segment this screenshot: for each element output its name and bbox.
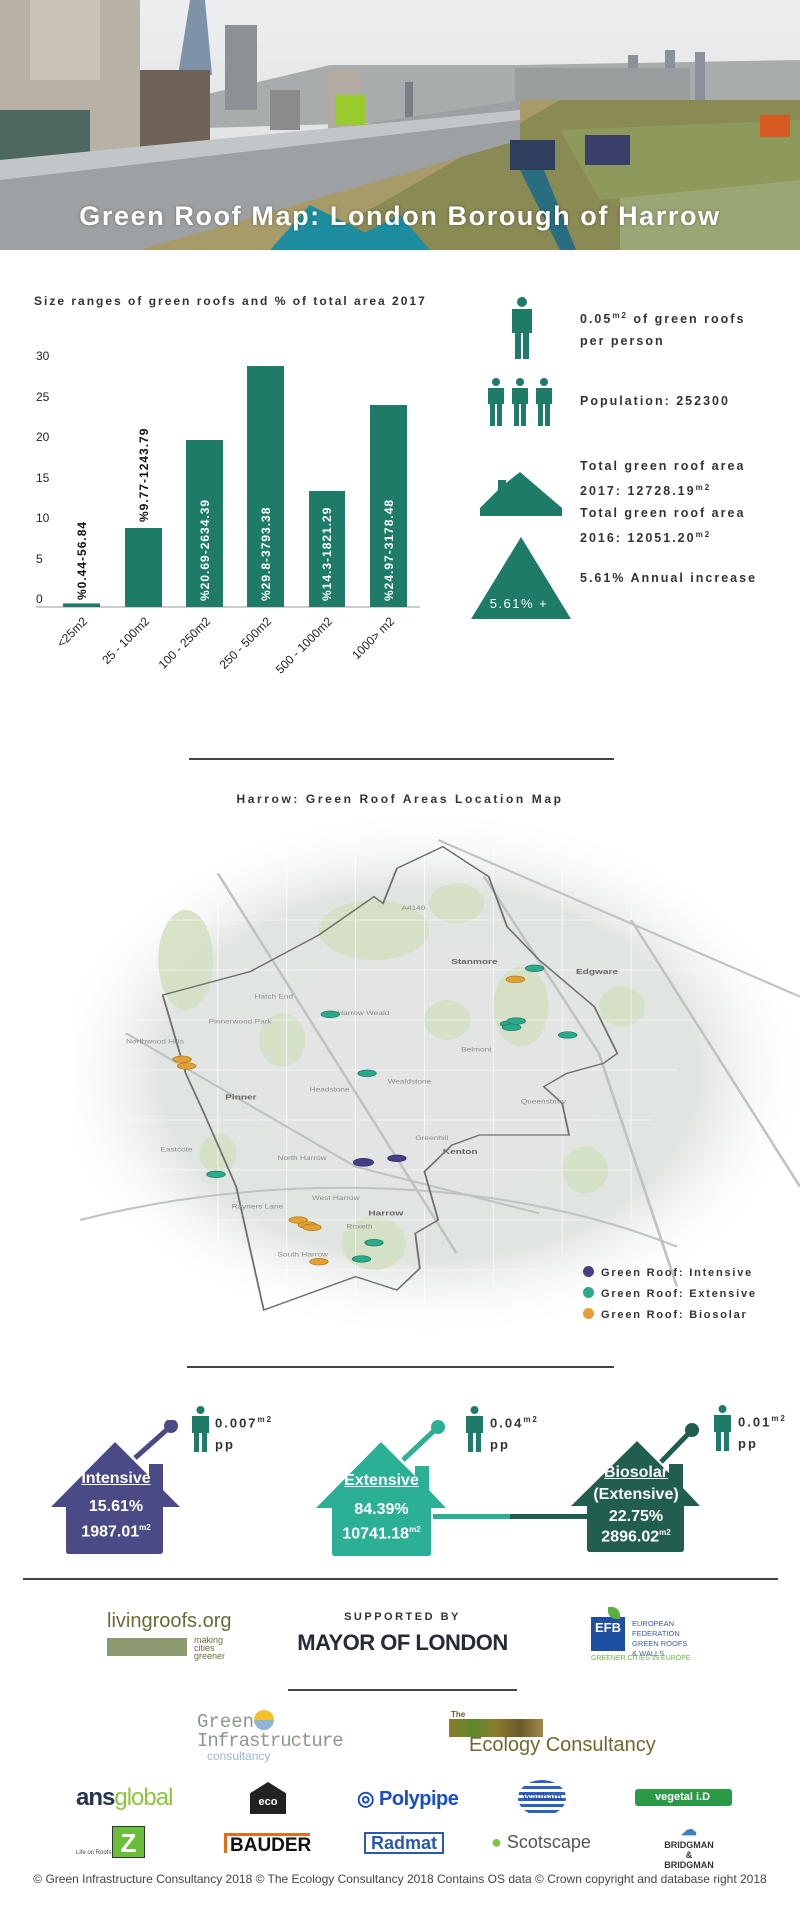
icon: triangle increase: 5.61% + <box>490 596 548 611</box>
house: biosolar: (Extensive) <box>593 1486 679 1503</box>
logo: EFB: & WALLS <box>632 1649 664 1658</box>
map: Greenhill <box>415 1134 449 1142</box>
logo row 1: ◎ Polypipe <box>357 1788 458 1810</box>
bar chart: %14.3-1821.29 <box>320 507 334 601</box>
map: West Harrow <box>312 1194 360 1202</box>
map: Pinnerwood Park <box>209 1018 272 1025</box>
logo: livingroofs: making <box>194 1635 223 1645</box>
logo row 1: vegetal i.D <box>655 1791 710 1803</box>
logo: green infrastructure <box>197 1710 343 1763</box>
bar chart: 100 - 250m2 <box>156 614 213 672</box>
bar chart: %24.97-3178.48 <box>382 499 396 601</box>
person: biosolar pp: 0.01m2 <box>738 1414 787 1429</box>
bar chart: %29.8-3793.38 <box>259 507 273 601</box>
bar chart: 0 <box>36 592 43 606</box>
text: total area: Total green roof area <box>580 506 745 520</box>
map: Eastcote <box>160 1146 193 1153</box>
bar chart: 5 <box>36 552 43 566</box>
header photo <box>0 0 800 250</box>
map title: Harrow: Green Roof Areas Location Map <box>236 792 564 806</box>
footer: © Green Infrastructure Consultancy 2018 © The Ecology Consultancy 2018 Contains OS data © Crown copyright and database right 2018 <box>33 1872 767 1886</box>
bar chart: <25m2 <box>54 614 90 650</box>
logo row 1: eco <box>259 1796 277 1808</box>
supported by: MAYOR OF LONDON <box>297 1630 508 1655</box>
logo row 2: ● Scotscape <box>491 1832 591 1852</box>
house: extensive <box>316 1420 446 1556</box>
map: Edgware <box>576 967 618 976</box>
logo row 2 <box>76 1822 714 1870</box>
logo row 2: BAUDER <box>230 1835 311 1856</box>
map: Stanmore <box>451 957 498 966</box>
logo: EFB: GREENER CITIES IN EUROPE <box>591 1655 691 1662</box>
text: total area: 2017: 12728.19m2 <box>580 483 711 498</box>
logo row 2: Life on Roofs <box>76 1850 111 1856</box>
logo: EFB: FEDERATION <box>632 1629 680 1638</box>
house: intensive: 1987.01m2 <box>81 1523 151 1540</box>
map: Wealdstone <box>388 1078 431 1085</box>
house: biosolar: Biosolar <box>604 1464 668 1481</box>
logo: green infrastructure: consultancy <box>207 1749 270 1763</box>
bar chart: %20.69-2634.39 <box>198 499 212 601</box>
icon: triangle increase <box>471 537 571 619</box>
map: Headstone <box>310 1086 350 1093</box>
bar chart: 30 <box>36 349 50 363</box>
logo row 2: Z <box>121 1828 136 1858</box>
map <box>80 839 800 1311</box>
logo: ecology consultancy <box>449 1710 656 1756</box>
bar chart <box>36 349 420 676</box>
text: per person <box>580 311 745 348</box>
house: intensive <box>51 1420 180 1554</box>
bar chart: 10 <box>36 511 50 525</box>
logo row 2: Radmat <box>371 1833 437 1853</box>
bar chart: 500 - 1000m2 <box>273 614 335 676</box>
bar chart: 1000> m2 <box>349 614 397 662</box>
map: Hatch End <box>255 993 293 1000</box>
legend: Green Roof: Biosolar <box>601 1309 748 1321</box>
map: Harrow <box>368 1209 403 1217</box>
text: total area: Total green roof area <box>580 459 745 473</box>
text: per person: per person <box>580 334 665 348</box>
logo row 1: Wallbarn <box>522 1791 562 1803</box>
bar chart: 25 <box>36 390 50 404</box>
title: Green Roof Map: London Borough of Harrow <box>79 201 721 231</box>
logo row 1 <box>76 1780 732 1814</box>
bar chart: %9.77-1243.79 <box>137 428 151 522</box>
logo row 2: & BRIDGMAN <box>664 1850 714 1870</box>
icon: three people <box>488 378 552 426</box>
person: intensive pp: 0.007m2 <box>215 1415 273 1430</box>
text: population: Population: 252300 <box>580 394 730 408</box>
legend <box>583 1266 757 1321</box>
text: total area <box>580 459 745 545</box>
house: biosolar: 2896.02m2 <box>601 1528 671 1545</box>
logo: ecology consultancy: The <box>451 1710 465 1719</box>
map: Roxeth <box>346 1223 373 1230</box>
logo row 2: ☁ <box>681 1822 697 1839</box>
house: extensive: 84.39% <box>354 1501 409 1518</box>
map: South Harrow <box>278 1251 329 1258</box>
person: extensive pp <box>466 1406 539 1452</box>
map: Kenton <box>443 1147 478 1156</box>
supported by <box>297 1611 508 1655</box>
house: extensive: 10741.18m2 <box>342 1525 421 1542</box>
map: Rayners Lane <box>232 1203 283 1210</box>
map: Belmont <box>461 1046 491 1053</box>
person: biosolar pp: pp <box>738 1436 758 1451</box>
text: per person: 0.05m2 of green roofs <box>580 311 745 326</box>
bar chart: 25 - 100m2 <box>99 614 152 667</box>
map: Harrow Weald <box>337 1009 389 1017</box>
house: intensive: 15.61% <box>89 1498 143 1515</box>
connector line <box>433 1514 510 1519</box>
legend: Green Roof: Intensive <box>601 1267 753 1279</box>
icon: house roof <box>480 472 562 516</box>
person: extensive pp: 0.04m2 <box>490 1415 539 1430</box>
logo: livingroofs: cities <box>194 1643 215 1653</box>
map: Queensbury <box>521 1098 566 1105</box>
house: extensive: Extensive <box>344 1472 419 1489</box>
person: biosolar pp <box>714 1405 787 1451</box>
person: extensive pp: pp <box>490 1437 510 1452</box>
logo: livingroofs <box>107 1610 232 1661</box>
map: A4140 <box>401 904 425 912</box>
icon: person <box>512 297 532 359</box>
logo: livingroofs: greener <box>194 1651 225 1661</box>
logo: EFB: GREEN ROOFS <box>632 1639 687 1648</box>
logo: EFB <box>591 1607 691 1662</box>
logo: ecology consultancy: Ecology Consultancy <box>469 1734 656 1756</box>
logo: EFB: EFB <box>595 1620 621 1635</box>
house: biosolar <box>571 1423 700 1552</box>
logo: green infrastructure: Infrastructure <box>197 1730 343 1752</box>
logo: green infrastructure: Green <box>197 1711 254 1733</box>
house: biosolar: 22.75% <box>609 1508 663 1525</box>
house: intensive: Intensive <box>81 1470 151 1487</box>
bar chart: 250 - 500m2 <box>217 614 274 672</box>
person: intensive pp: pp <box>215 1437 235 1452</box>
bar chart: 20 <box>36 430 50 444</box>
text: total area: 2016: 12051.20m2 <box>580 530 711 545</box>
bar chart: 15 <box>36 471 50 485</box>
map: Northwood Hills <box>126 1038 184 1045</box>
supported by: SUPPORTED BY <box>344 1611 461 1623</box>
bar chart: %0.44-56.84 <box>75 521 89 600</box>
map: Pinner <box>225 1093 257 1101</box>
chart title: Size ranges of green roofs and % of total area 2017 <box>34 294 427 308</box>
person: intensive pp <box>192 1406 273 1452</box>
text: annual increase: 5.61% Annual increase <box>580 571 757 585</box>
legend: Green Roof: Extensive <box>601 1288 757 1300</box>
logo row 1: ansglobal <box>76 1784 172 1811</box>
map: North Harrow <box>278 1154 328 1162</box>
logo: livingroofs: livingroofs.org <box>107 1610 232 1632</box>
logo: EFB: EUROPEAN <box>632 1619 674 1628</box>
logo row 2: BRIDGMAN <box>664 1840 714 1850</box>
